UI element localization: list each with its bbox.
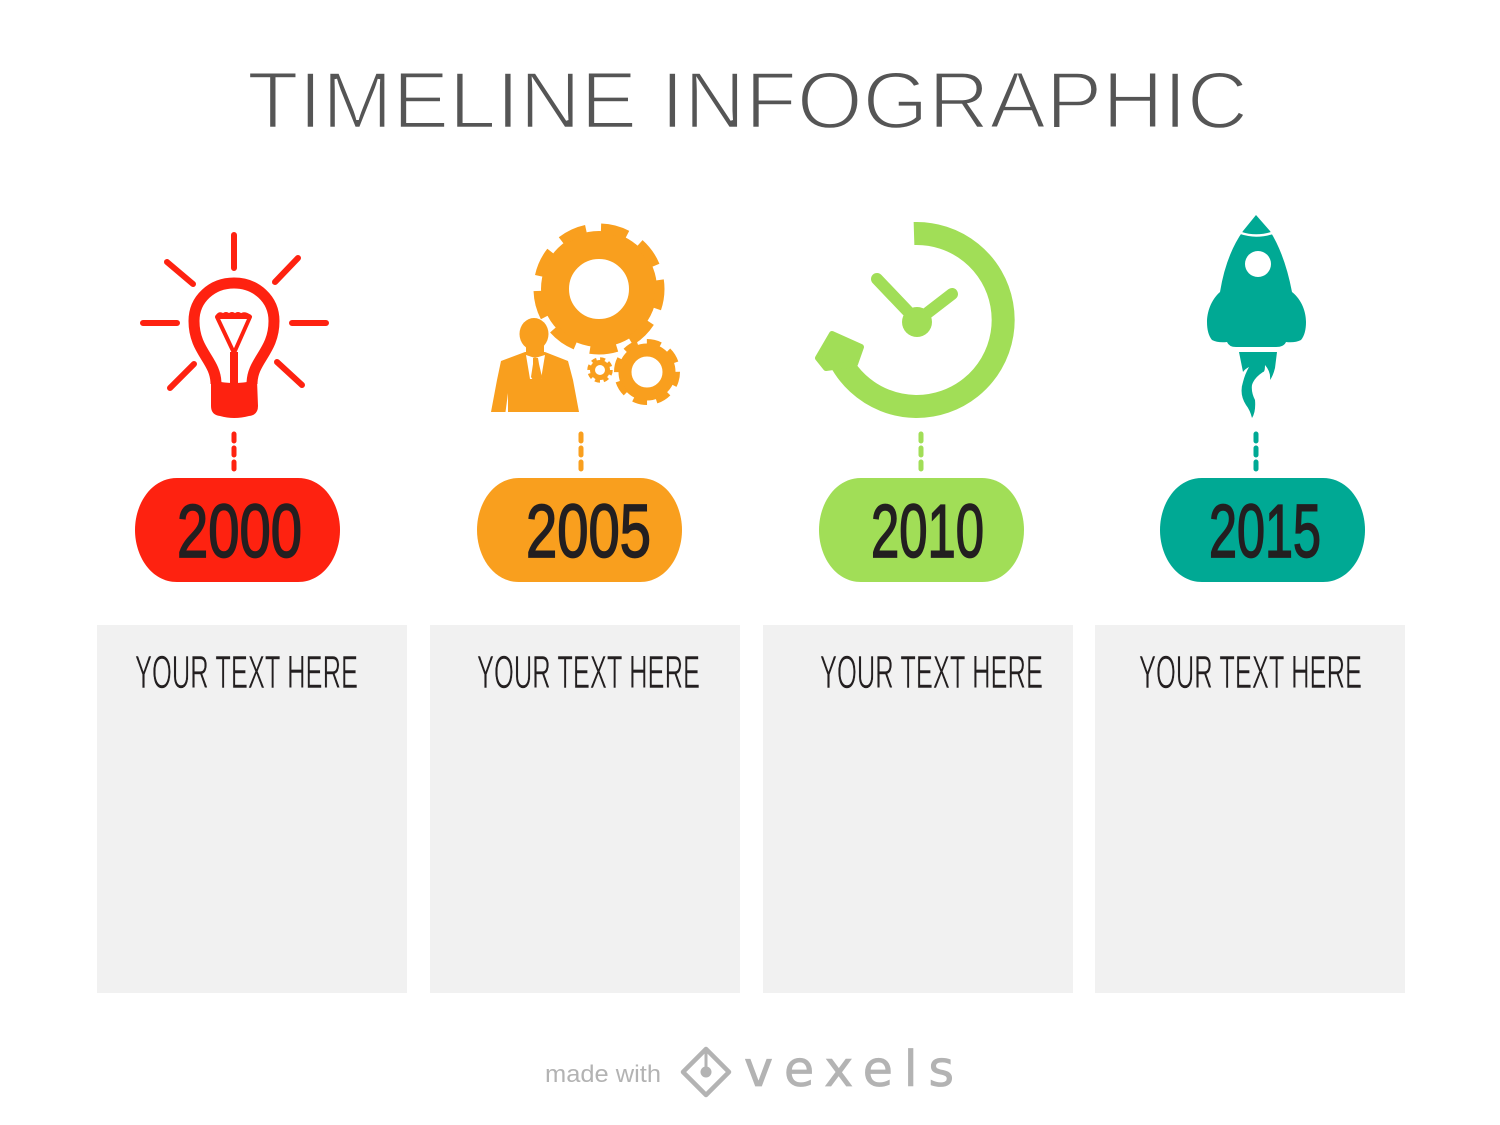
year pill: 2015: 2015 [1209, 489, 1321, 573]
year pill: 2010: 2010 [871, 489, 984, 573]
text panel: 2005: YOUR TEXT HERE [477, 646, 700, 698]
icon: light bulb [143, 235, 326, 418]
connector: 2000 [232, 434, 236, 469]
icon: rocket [1207, 215, 1306, 418]
text panel: 2015 [1095, 625, 1405, 993]
vexels wordmark: vexels [744, 1041, 954, 1098]
year pill: 2015 [1160, 478, 1365, 582]
text panel: 2010: YOUR TEXT HERE [820, 646, 1043, 698]
text panel: 2000: YOUR TEXT HERE [135, 646, 358, 698]
text panel: 2010 [763, 625, 1073, 993]
year pill: 2005: 2005 [526, 489, 651, 573]
year pill: 2000: 2000 [177, 489, 302, 573]
column: 2005 [430, 228, 740, 993]
title: TIMELINE INFOGRAPHIC [247, 56, 1248, 146]
icon: gears and businessman [491, 228, 677, 412]
column: 2000 [97, 235, 407, 993]
year pill: 2000 [135, 478, 340, 582]
connector: 2005 [578, 434, 584, 469]
icon: clock with arrow [818, 233, 1003, 406]
text panel: 2005 [430, 625, 740, 993]
column: 2015 [1095, 215, 1405, 993]
column: 2010 [763, 233, 1073, 993]
year pill: 2010 [819, 478, 1024, 582]
text panel: 2000 [97, 625, 407, 993]
connector: 2015 [1254, 434, 1258, 469]
connector: 2010 [918, 434, 924, 469]
footer: made with vexels [545, 1041, 954, 1098]
footer text: made with [545, 1061, 661, 1088]
year pill: 2005 [477, 478, 682, 582]
icon: vexels logo diamond [683, 1049, 729, 1095]
